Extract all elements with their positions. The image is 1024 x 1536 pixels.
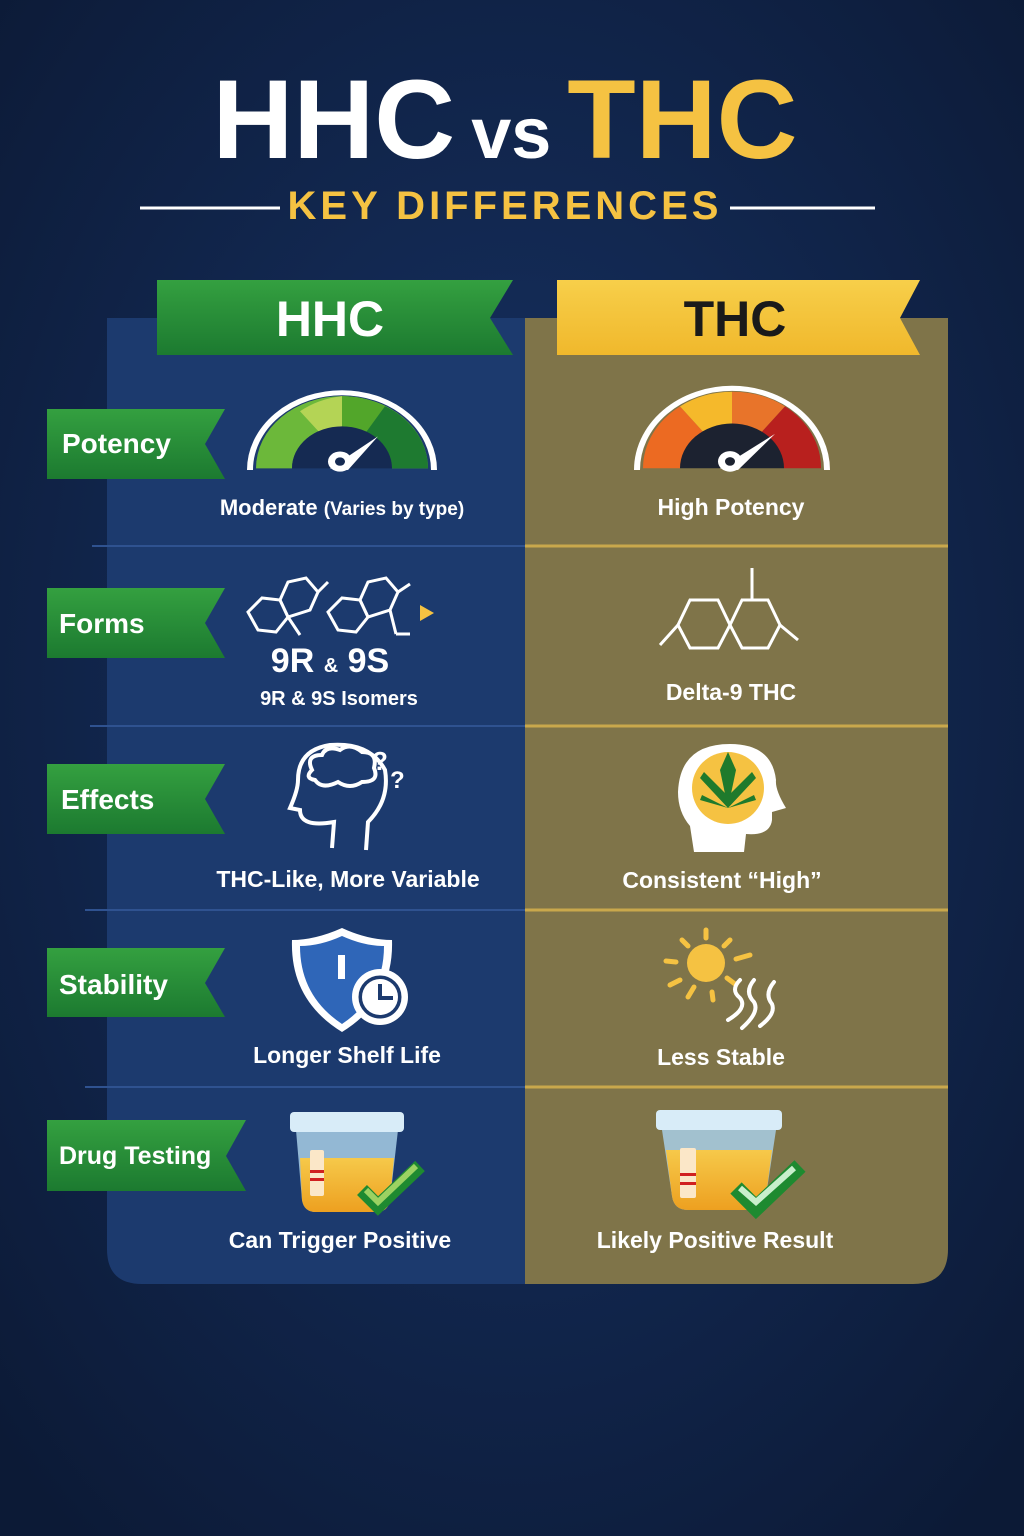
label: Potency [47, 409, 225, 479]
icon: head with cloud: ? [390, 767, 405, 794]
icon: HHC molecules [248, 578, 434, 635]
label: Potency: Potency [62, 428, 171, 459]
icon: sun with heat [666, 930, 774, 1028]
text: THC-Like: THC-Like, More Variable [216, 866, 480, 892]
header: THC: THC [684, 291, 786, 347]
header: THC [557, 280, 920, 355]
text: Likely Positive Result: Likely Positive Result [597, 1227, 834, 1253]
panel: HHC column [107, 318, 525, 1284]
icon: THC molecule [660, 568, 798, 648]
label: Effects: Effects [61, 784, 154, 815]
text: Can Trigger Positive: Can Trigger Positive [229, 1227, 451, 1253]
text: 9R & 9S: 9R & 9S [271, 642, 389, 680]
icon: THC urine cup [656, 1110, 800, 1210]
icon: HHC urine cup [290, 1112, 420, 1212]
icon: HHC gauge [250, 393, 434, 472]
icon: head with leaf [678, 744, 786, 852]
icon: head with cloud: ? [372, 746, 388, 776]
text: Less Stable: Less Stable [657, 1044, 785, 1070]
label: Drug Testing: Drug Testing [59, 1142, 211, 1170]
label: Stability: Stability [59, 969, 168, 1000]
label: Stability [47, 948, 225, 1017]
label: Forms [47, 588, 225, 658]
title: HHCvsTHC [213, 57, 797, 182]
panel: THC column [525, 318, 948, 1284]
icon: shield with clock [292, 928, 408, 1032]
text: Longer Shelf Life: Longer Shelf Life [253, 1042, 441, 1068]
label: Effects [47, 764, 225, 834]
icon: head with cloud [290, 745, 405, 850]
header: HHC [157, 280, 513, 355]
label: Forms: Forms [59, 608, 145, 639]
label: Drug Testing [47, 1120, 246, 1191]
text: Consistent High: Consistent “High” [622, 867, 822, 893]
text: Moderate: Moderate (Varies by type) [220, 495, 464, 520]
header: HHC: HHC [276, 291, 384, 347]
text: High Potency: High Potency [658, 494, 805, 520]
text: isomers: 9R & 9S Isomers [260, 688, 418, 710]
text: Delta-9 THC: Delta-9 THC [666, 679, 796, 705]
icon: THC gauge [637, 388, 827, 472]
subtitle: KEY DIFFERENCES [288, 184, 722, 228]
